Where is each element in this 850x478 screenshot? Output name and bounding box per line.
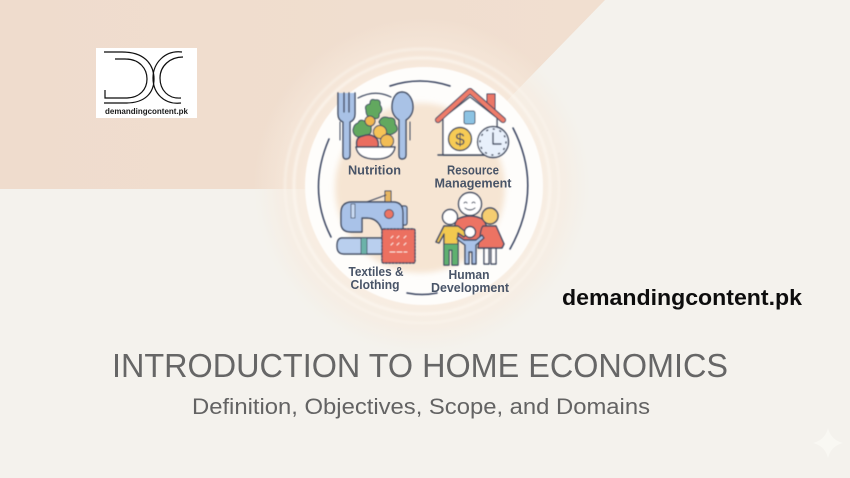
label: Textiles & Clothing [348,265,404,292]
label: Human Development [431,268,510,295]
ground line [438,154,490,156]
left child [442,210,458,224]
label: Resource Management [434,164,512,190]
label: Nutrition: Nutrition [348,164,401,178]
icon: spoon [392,92,413,159]
icon: leafy greens [353,100,397,137]
icon: orange carrot [365,116,375,126]
logo wordmark: demandingcontent.pk [105,106,188,116]
plate rim arc [358,93,391,98]
small child [464,226,476,238]
icon: house with coin and clock: $ [455,130,465,149]
white circle with inner peach disc [305,67,543,305]
father [452,216,492,240]
window [464,111,475,124]
chimney [487,94,495,110]
machine base [337,238,383,254]
icon: tomato [357,135,378,147]
fabric swatch [382,229,415,263]
machine dial [384,210,394,218]
label: Human Development: Development [431,281,510,295]
website label: demandingcontent.pk [562,285,802,310]
icon: fork [338,93,355,159]
label: Human Development: Human [448,268,490,282]
machine body [341,202,403,232]
icon: sewing machine and fabric [337,191,415,263]
logo mark: DC [104,52,183,103]
label: Resource Management: Resource [447,164,499,178]
icon: nutrition [338,92,413,159]
coin [448,128,472,150]
clock [478,126,508,158]
label: Textiles & Clothing: Clothing [350,278,400,292]
circular arcs [318,81,528,294]
mother [484,248,496,264]
icon: sparkle watermark [813,428,843,458]
roof [438,91,503,120]
logo [96,48,197,118]
title: INTRODUCTION TO HOME ECONOMICS [112,347,728,384]
machine end cap [400,206,407,225]
label: Resource Management: Management [434,176,512,190]
house walls [443,97,497,155]
icon: house with coin and clock [438,91,508,158]
thread spool [385,191,391,207]
label: Textiles & Clothing: Textiles & [348,265,404,279]
background: peach upper panel [0,0,605,189]
icon: family [436,192,504,265]
icon: bowl [356,147,395,159]
subtitle: Definition, Objectives, Scope, and Domains [192,394,650,419]
glow and rings around the circle [254,18,590,354]
